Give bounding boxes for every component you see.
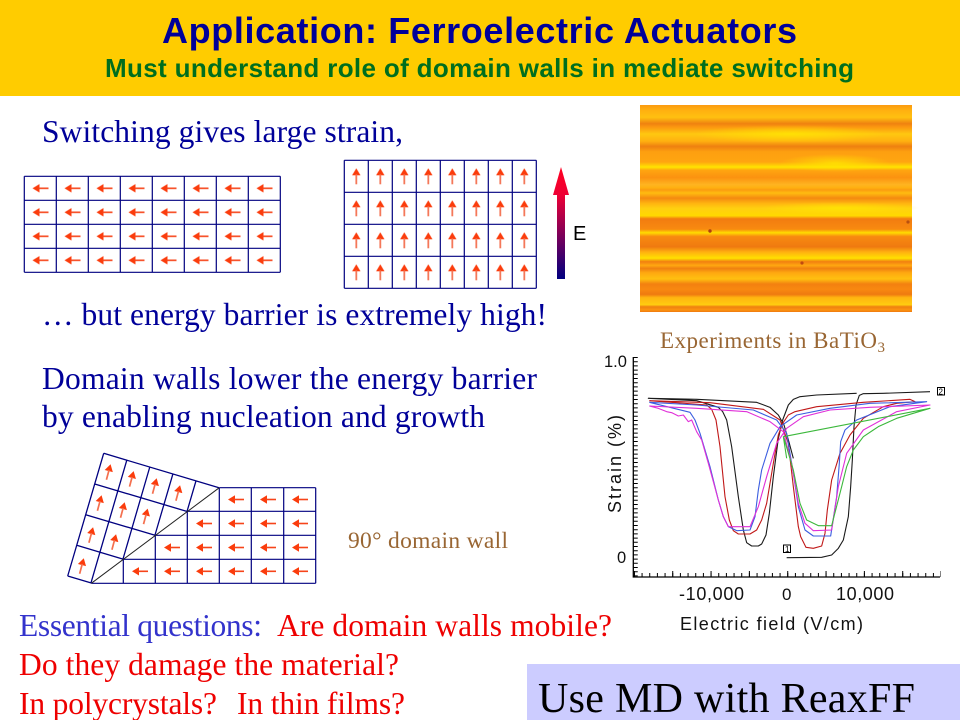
caption: experiments in BaTiO3: Experiments in BaTiO — [660, 328, 877, 353]
text: essential questions: Essential questions: — [19, 608, 262, 643]
x axis labels: Electric field (V/cm) — [680, 614, 863, 634]
header banner — [0, 0, 960, 96]
text: essential questions: In thin films? — [237, 686, 405, 720]
text: essential questions: Are domain walls mobile? — [277, 608, 612, 643]
x axis labels: 10,000 — [836, 584, 894, 604]
text: domain walls lower barrier — [42, 361, 538, 434]
curve: blue — [649, 402, 927, 536]
x axis labels: 0 — [782, 585, 791, 604]
x axis labels: -10,000 — [679, 584, 744, 604]
y axis labels — [604, 353, 627, 567]
text: essential questions: In polycrystals? — [19, 686, 217, 720]
arrow: electric field E — [553, 167, 586, 279]
marker 1: 1 — [785, 545, 790, 554]
hysteresis curves — [648, 392, 930, 558]
y axis labels: 0 — [617, 549, 626, 567]
label: E: E — [573, 223, 586, 245]
diagram: horizontal polarization grid — [24, 176, 280, 272]
x axis labels — [679, 584, 894, 634]
text: essential questions: Do they damage the material? — [19, 647, 399, 682]
marker 2 — [938, 388, 944, 396]
text: energy barrier: … but energy barrier is extremely high! — [42, 297, 547, 332]
y axis labels: Strain (%) — [605, 415, 625, 513]
curve: red — [649, 399, 915, 548]
text: essential questions — [19, 608, 612, 720]
text: domain walls lower barrier: by enabling nucleation and growth — [42, 399, 485, 434]
caption: experiments in BaTiO3: 3 — [878, 340, 885, 356]
subtitle: Must understand role of domain walls in mediate switching — [105, 53, 854, 83]
marker 2: 2 — [938, 388, 944, 396]
axes — [633, 357, 941, 577]
curve: green — [783, 408, 930, 526]
curve: magenta — [649, 405, 930, 531]
text: switching gives large strain: Switching gives large strain, — [42, 114, 403, 149]
micrograph: domain stripes in BaTiO3 — [640, 105, 920, 312]
diagram: vertical polarization grid — [344, 160, 536, 288]
label: 90 degree domain wall: 90° domain wall — [348, 528, 508, 554]
title: Application: Ferroelectric Actuators — [162, 10, 797, 51]
y axis labels: 1.0 — [604, 353, 627, 371]
callout: use MD with ReaxFF — [527, 664, 960, 720]
chart: strain vs electric field hysteresis — [604, 353, 944, 634]
curve: black — [648, 392, 930, 558]
diagram: 90 degree domain wall grid — [68, 453, 316, 583]
marker 1 — [784, 545, 790, 554]
text: domain walls lower barrier: Domain walls lower the energy barrier — [42, 361, 538, 396]
